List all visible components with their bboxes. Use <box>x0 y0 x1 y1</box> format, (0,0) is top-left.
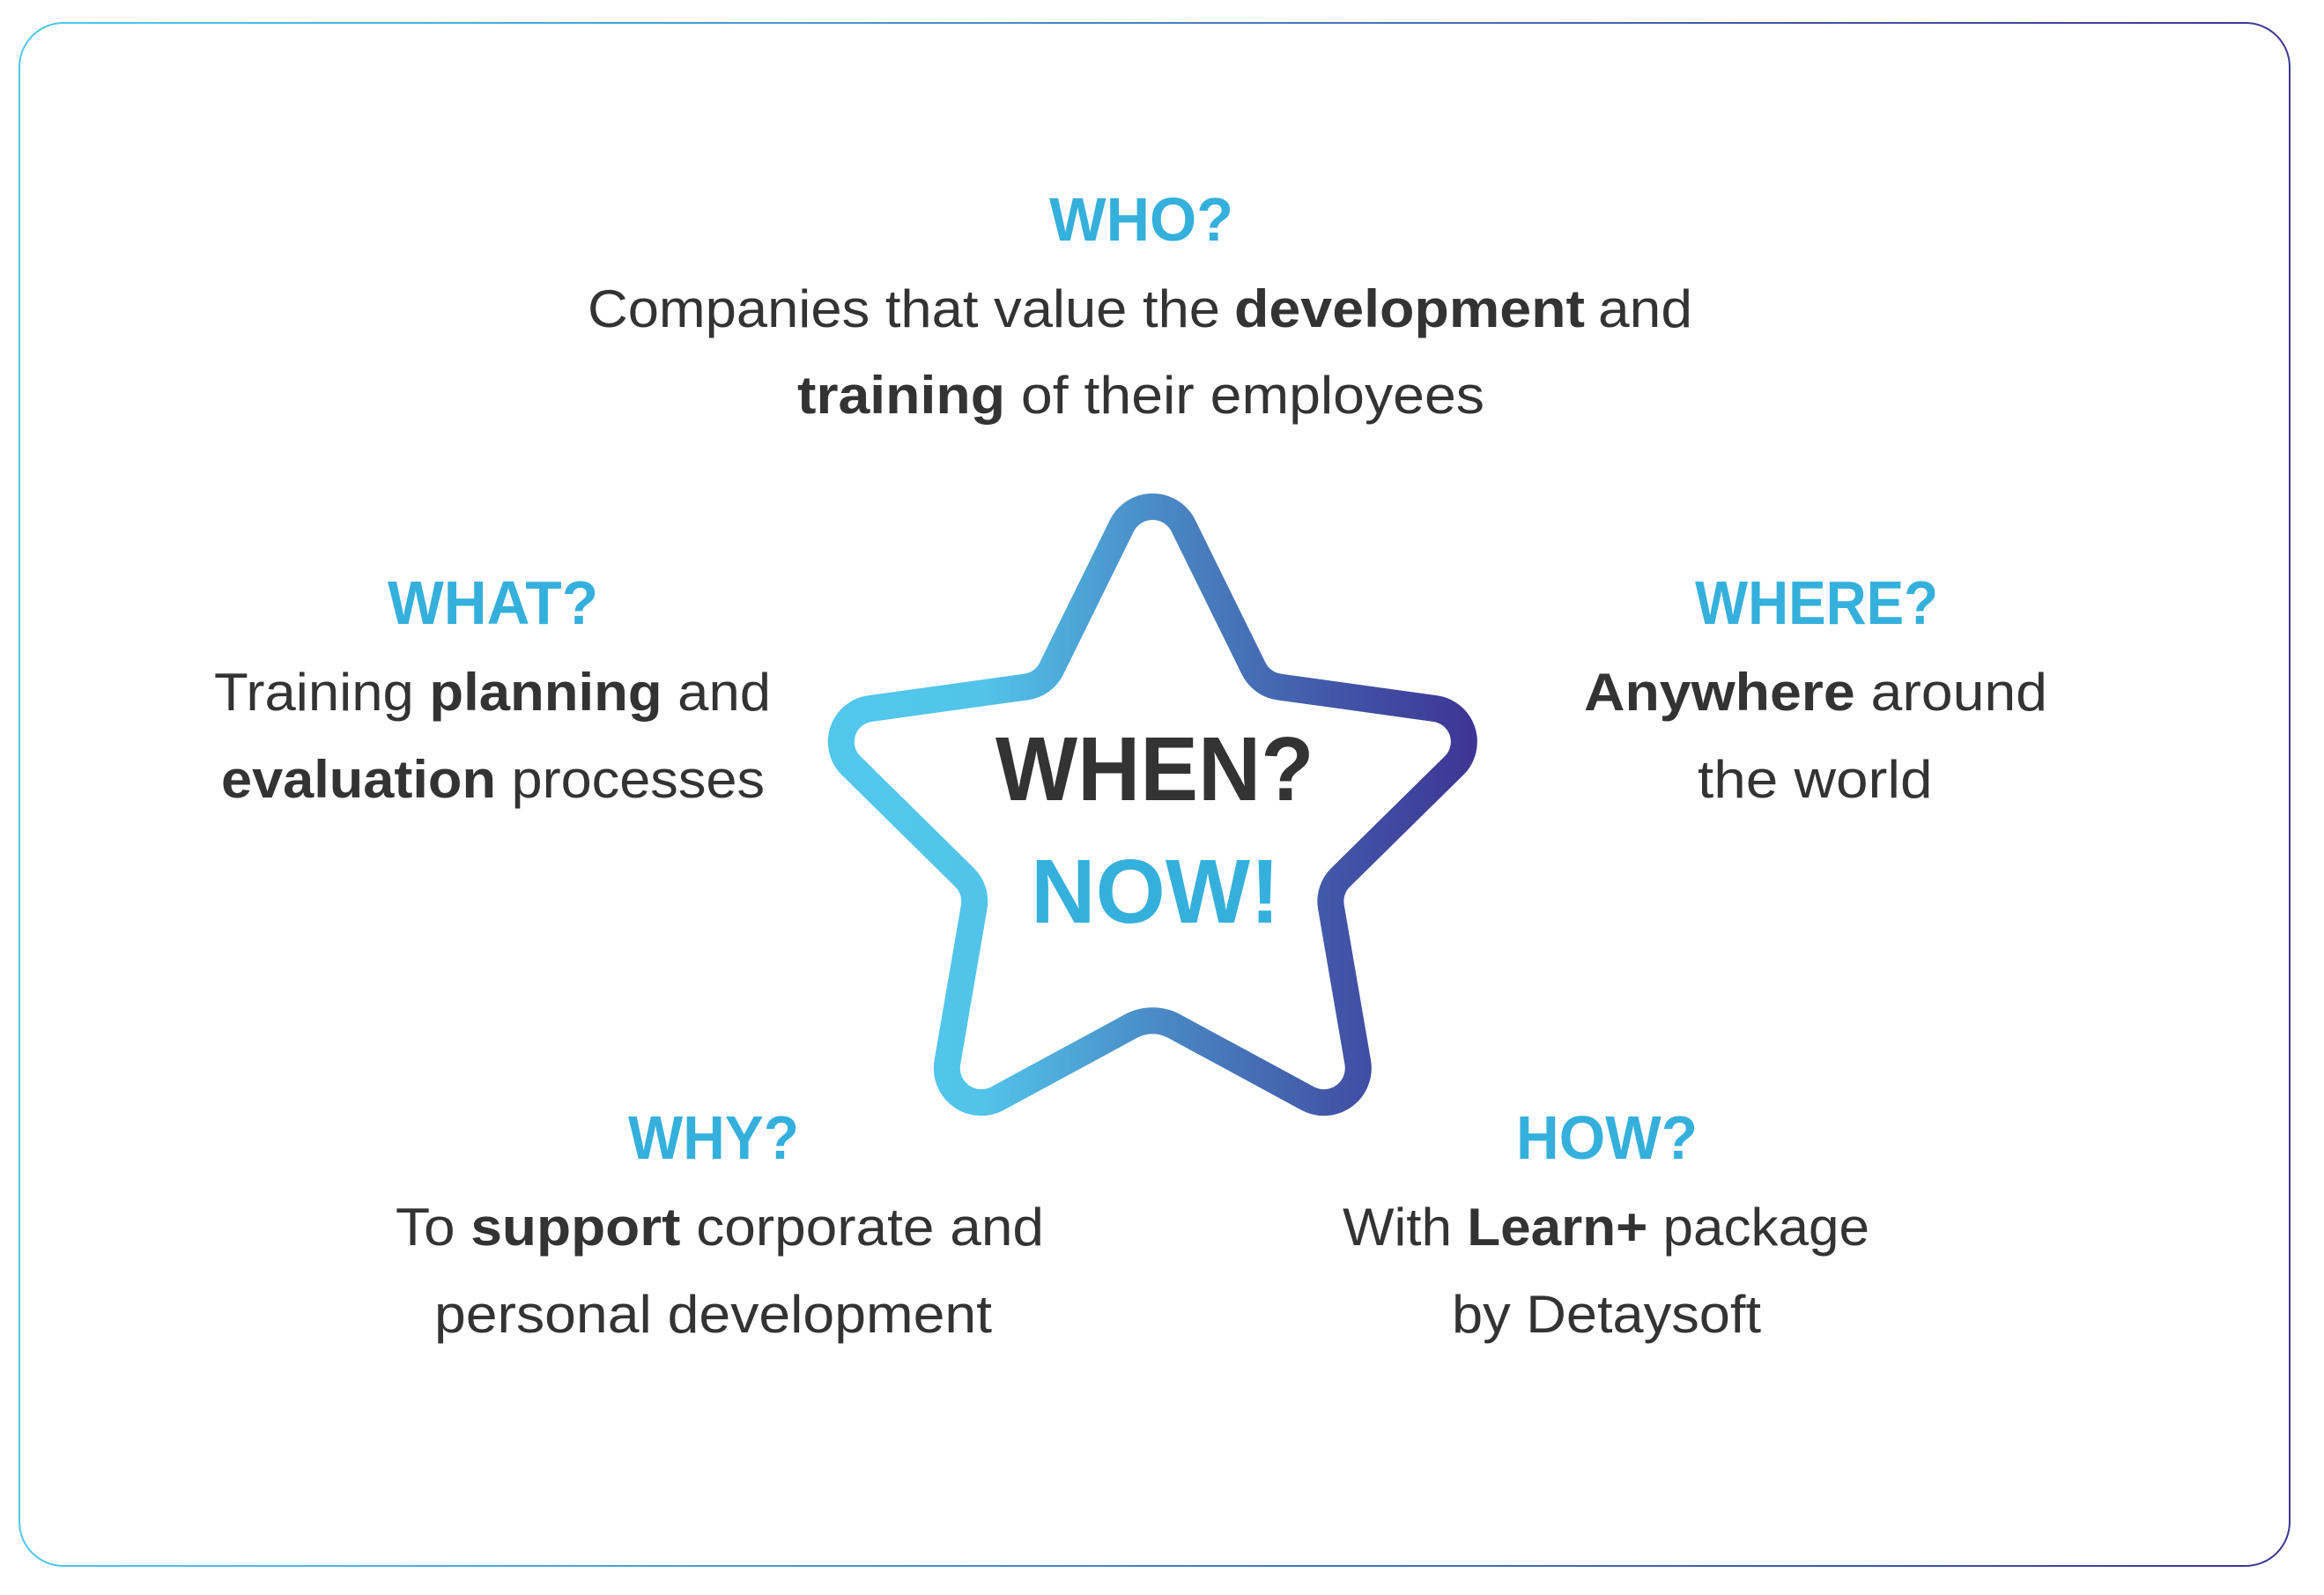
text: who line 1: and <box>1598 279 1692 338</box>
heading: why: WHY? <box>628 1103 799 1172</box>
heading: what: WHAT? <box>388 568 598 637</box>
panel: where <box>1584 568 2047 809</box>
text: what line 2: evaluation processes <box>221 750 765 809</box>
panel: who <box>588 185 1692 425</box>
text: who line 1 <box>588 279 1692 338</box>
text: who line 1: development <box>1234 279 1585 338</box>
panel: how <box>1343 1103 1869 1344</box>
text: where line 1: Anywhere around <box>1584 663 2047 722</box>
text: who line 2: training of their employees <box>797 366 1484 425</box>
text: why line 1: To support corporate and <box>396 1198 1044 1257</box>
center text: when: WHEN? <box>995 718 1314 820</box>
text: how line 2: by Detaysoft <box>1452 1285 1761 1344</box>
center text: now: NOW! <box>1031 841 1280 942</box>
text: why line 2: personal development <box>434 1285 992 1344</box>
heading: where: WHERE? <box>1695 568 1938 637</box>
panel: what <box>214 568 771 809</box>
text: where line 2: the world <box>1698 750 1933 809</box>
heading: who: WHO? <box>1049 185 1233 254</box>
icon: gradient star outline <box>841 507 1464 1102</box>
text: how line 1: With Learn+ package <box>1343 1198 1869 1257</box>
text: who line 1: Companies that value the <box>588 279 1220 338</box>
text: what line 1: Training planning and <box>214 663 771 722</box>
panel: why <box>396 1103 1044 1344</box>
heading: how: HOW? <box>1516 1103 1698 1172</box>
